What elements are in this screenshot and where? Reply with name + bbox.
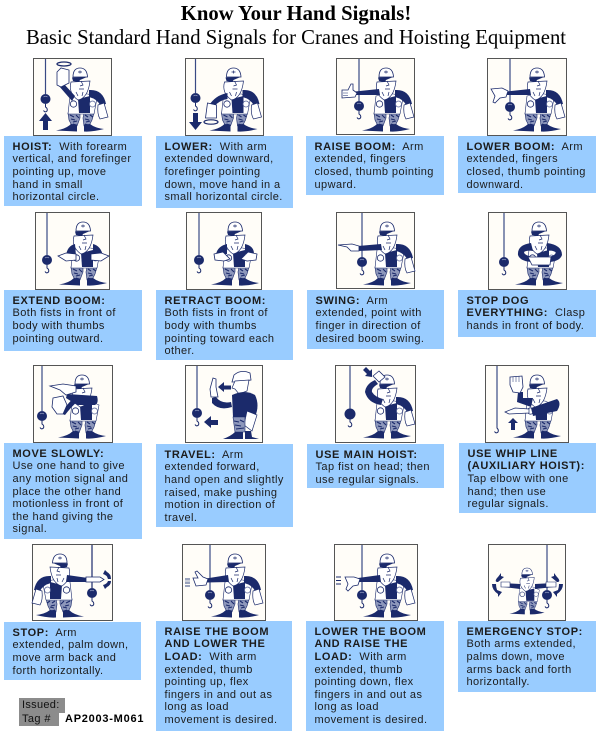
icon: lower boom raise load signal [334,544,418,621]
icon: extend boom signal [35,212,110,290]
icon: lower boom signal [487,58,567,136]
text: stop dog everything: STOP DOG [466,295,529,307]
text: move slowly: the hand giving the [12,511,113,523]
icon: raise boom signal [336,58,415,135]
subtitle: Basic Standard Hand Signals for Cranes and Hoisting Equipment [26,27,566,49]
text: lower the boom and raise the load: LOWER THE BOOM [314,626,426,638]
text: swing: extended, point with [316,307,422,319]
icon: travel signal, side view [185,365,263,443]
panel: travel [156,365,293,527]
panel: stop [4,544,141,680]
text: retract boom [156,290,293,360]
text: travel: extended forward, [164,461,260,473]
text: stop: STOP: Arm [12,627,77,639]
text: move slowly: any motion signal and [12,473,128,485]
icon: stop signal [32,544,113,621]
text: stop: forth horizontally. [12,665,103,677]
panel: swing [307,212,444,349]
text: use whip line: Tap elbow with one [468,473,569,485]
text: travel: raised, make pushing [164,487,277,499]
text: stop dog everything: hands in front of body. [466,320,584,332]
text: emergency stop: EMERGENCY STOP: [466,626,583,638]
text: emergency stop: arms back and forth [466,664,572,676]
panel: stop dog everything [458,212,596,337]
icon: use whip line signal [485,365,569,443]
panel: use main hoist [307,365,444,488]
tag number: AP2003-M061 [65,713,144,725]
text: travel: hand open and slightly [164,474,284,486]
text: lower: forefinger pointing [164,166,261,178]
text: raise the boom and lower the load: LOAD: With arm [164,651,257,663]
text: lower: extended downward, [164,153,274,165]
icon: move slowly signal [33,365,113,443]
text: raise the boom and lower the load: movement is desired. [164,714,277,726]
text: stop: extended, palm down, [12,639,129,651]
text: travel: TRAVEL: Arm [164,449,243,461]
text: extend boom: pointing outward. [12,333,103,345]
text: lower the boom and raise the load [306,621,444,731]
text: raise the boom and lower the load: long as load [164,701,229,713]
text: raise boom: upward. [314,179,357,191]
icon: emergency stop signal [488,544,566,621]
icon: hoist signal [33,58,112,136]
icon: use main hoist signal [335,365,416,443]
text: lower [156,136,293,208]
text: lower the boom and raise the load: fingers in and out as [314,689,422,701]
text: hoist: HOIST: With forearm [12,141,127,153]
text: lower: LOWER: With arm [164,141,267,153]
icon: swing signal [336,212,415,289]
text: lower the boom and raise the load: pointing down, flex [314,676,414,688]
text: lower: small horizontal circle. [164,191,283,203]
text: extend boom: Both fists in front of [12,307,116,319]
text: stop [4,622,141,680]
text: retract boom: pointing toward each [164,333,274,345]
text: use whip line: USE WHIP LINE [468,448,558,460]
text: hoist [4,136,142,206]
text: lower the boom and raise the load: movement is desired. [314,714,427,726]
text: travel [156,444,293,527]
text: lower boom: closed, thumb pointing [466,166,586,178]
panel: use whip line [459,365,596,513]
text: lower the boom and raise the load: AND RAISE THE [314,638,408,650]
text: hoist: vertical, and forefinger [12,153,131,165]
issued label: Issued: [22,699,60,711]
text: emergency stop: horizontally. [466,676,530,688]
text: lower boom: downward. [466,179,523,191]
text: extend boom: EXTEND BOOM: [12,295,106,307]
tag label: Tag # [22,713,51,725]
text: use main hoist [307,444,444,488]
text: use main hoist: Tap fist on head; then [316,461,430,473]
text: move slowly [4,443,142,539]
text: use whip line: hand; then use [468,486,546,498]
text: swing [307,290,444,349]
text: emergency stop [458,621,596,692]
icon: lower signal [185,58,264,136]
issued tag block [19,698,144,726]
text: stop dog everything: EVERYTHING: Clasp [466,307,585,319]
text: move slowly: MOVE SLOWLY: [12,448,104,460]
text: raise the boom and lower the load: RAISE THE BOOM [164,626,269,638]
text: use whip line: (AUXILIARY HOIST): [468,460,585,472]
panel: extend boom [4,212,142,351]
text: retract boom: Both fists in front of [164,307,268,319]
text: use whip line: regular signals. [468,498,549,510]
tag label [19,713,59,726]
text: move slowly: place the other hand [12,486,121,498]
panel: retract boom [156,212,293,360]
text: retract boom: body with thumbs [164,320,257,332]
text: use main hoist: USE MAIN HOIST: [316,449,418,461]
text: raise the boom and lower the load: AND LOWER THE [164,638,265,650]
text: extend boom [4,290,142,351]
text: emergency stop: palms down, move [466,651,565,663]
text: lower: down, move hand in a [164,179,281,191]
text: raise boom: closed, thumb pointing [314,166,434,178]
text: stop dog everything [458,290,596,337]
text: raise the boom and lower the load: pointing up, flex [164,676,249,688]
text: move slowly: signal. [12,523,47,535]
text: swing: finger in direction of [316,320,421,332]
panel: raise boom [306,58,444,195]
text: raise the boom and lower the load: extended, thumb [164,664,253,676]
text: hoist: hand in small [12,179,83,191]
panel: lower [156,58,293,208]
text: stop: move arm back and [12,652,116,664]
text: extend boom: body with thumbs [12,320,105,332]
text: use main hoist: use regular signals. [316,474,419,486]
text: retract boom: RETRACT BOOM: [164,295,266,307]
text: travel: motion in direction of [164,499,275,511]
text: raise the boom and lower the load: fingers in and out as [164,689,272,701]
text: swing: desired boom swing. [316,333,424,345]
text: lower the boom and raise the load: extended, thumb [314,664,403,676]
text: raise boom: extended, fingers [314,153,406,165]
text: lower boom: extended, fingers [466,153,558,165]
panel: raise the boom and lower the load [156,544,292,731]
panel: hoist [4,58,142,206]
text: hoist: pointing up, move [12,166,106,178]
icon: stop dog everything signal [488,212,567,290]
icon: raise boom lower load signal [182,544,266,621]
text: raise boom: RAISE BOOM: Arm [314,141,424,153]
text: use whip line [459,443,596,513]
text: hoist: horizontal circle. [12,191,100,203]
text: raise boom [306,136,444,195]
text: swing: SWING: Arm [316,295,388,307]
text: retract boom: other. [164,345,195,357]
text: raise the boom and lower the load [156,621,292,731]
text: lower the boom and raise the load: long as load [314,701,379,713]
text: lower the boom and raise the load: LOAD: With arm [314,651,407,663]
text: lower boom [458,136,596,193]
text: lower boom: LOWER BOOM: Arm [466,141,583,153]
text: emergency stop: Both arms extended, [466,638,576,650]
issued label [19,698,65,713]
panel: lower the boom and raise the load [306,544,444,731]
text: travel: travel. [164,512,197,524]
icon: retract boom signal [186,212,262,290]
title: Know Your Hand Signals! [181,3,411,25]
text: move slowly: motionless in front of [12,498,123,510]
panel: lower boom [458,58,596,193]
panel: emergency stop [458,544,596,692]
panel: move slowly [4,365,142,539]
text: move slowly: Use one hand to give [12,460,125,472]
